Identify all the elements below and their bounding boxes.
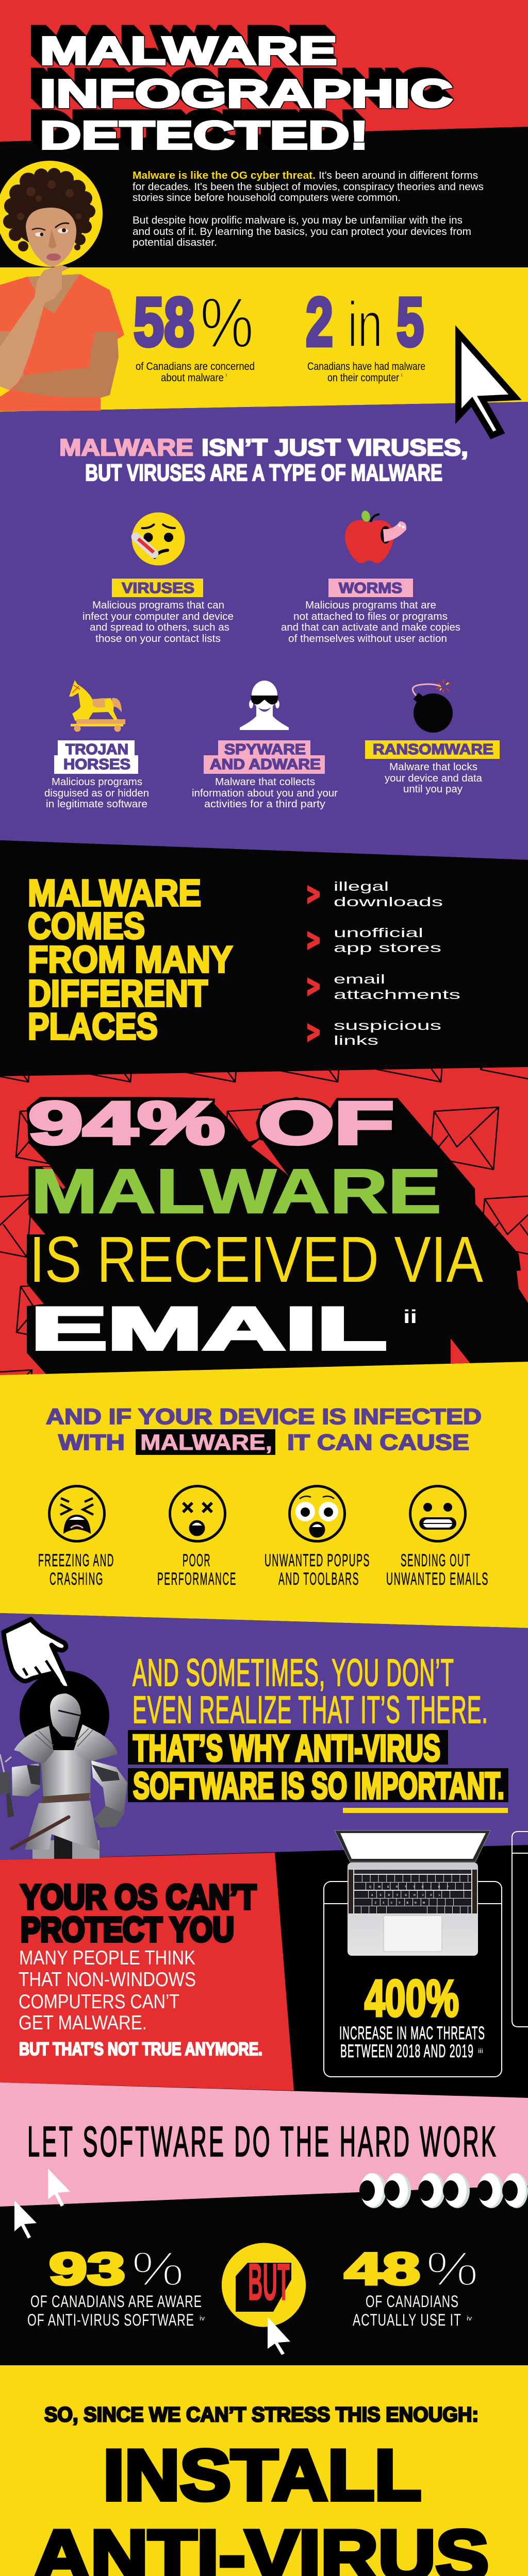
icon: apple with worm [345, 510, 406, 563]
callout: anti-virus importance [128, 1728, 508, 1813]
statistic: 48 percent actually use it: 48 [344, 2243, 420, 2294]
text: email: EMAIL [31, 1295, 387, 1362]
title [40, 29, 453, 158]
text: trojan horses description [44, 776, 149, 810]
heading: malware comes from many different places: COMES [28, 906, 145, 947]
label: viruses [112, 579, 203, 597]
icon: chevrons [307, 885, 320, 1042]
text: effect labels: AND TOOLBARS [278, 1569, 359, 1589]
label: trojan horses [54, 740, 138, 774]
heading: malware comes from many different places: DIFFERENT [28, 973, 208, 1014]
heading: since we can't stress this enough: SO, SINCE WE CAN’T STRESS THIS ENOUGH: [44, 2403, 478, 2426]
icon: small cursor [48, 2168, 70, 2207]
label: viruses: VIRUSES [122, 580, 194, 597]
panel: yellow stats background [0, 267, 528, 412]
text: spyware description [192, 776, 338, 810]
text: sometimes you don't realize [133, 1651, 488, 1731]
text: ransomware description: Malware that locks [389, 761, 477, 773]
panel: black mac threats background [275, 1845, 528, 2098]
footnote mark: ii [403, 1306, 417, 1327]
text: ransomware description: your device and data [385, 773, 483, 784]
stat: 2 in 5 Canadians: i [401, 372, 402, 378]
icon: spy silhouette [240, 681, 289, 730]
icon: bomb [412, 680, 453, 733]
stat: 58 percent of Canadians: % [200, 283, 254, 363]
stat: 58 percent of Canadians: i [226, 372, 227, 378]
statistic: 48 percent actually use it: ACTUALLY USE IT [353, 2311, 461, 2329]
text: malware: MALWARE [31, 1156, 441, 1226]
statistic: 400 percent increase in mac threats: 400% [365, 1970, 459, 2027]
illustration: laptop: Z X C V B N M [375, 1902, 425, 1905]
icon: googly eyes [359, 2173, 528, 2208]
icon: grimacing face [410, 1486, 465, 1541]
intro text: It's been around in different forms [319, 170, 478, 181]
panel: red title background [0, 0, 528, 142]
icon: small cursor [14, 2200, 37, 2239]
label: worms [328, 579, 413, 597]
text: effect labels [38, 1551, 489, 1589]
panel: purple malware types background [0, 402, 528, 860]
title: DETECTED! [40, 113, 369, 158]
icon: large cursor [458, 333, 515, 435]
text: source items: unofficial [334, 926, 423, 940]
stat: 58 percent of Canadians: 58 [134, 284, 194, 361]
label: spyware and adware: SPYWARE [224, 741, 306, 758]
icon: shocked face [290, 1486, 344, 1541]
heading: malware comes from many different places: PLACES [28, 1006, 158, 1047]
intro text: for decades. It's been the subject of movies, conspiracy theories and news [133, 181, 484, 193]
badge: but [222, 2243, 306, 2327]
label: trojan horses: TROJAN [65, 741, 128, 758]
heading: malware comes from many different places [28, 873, 233, 1047]
text: your OS can't protect you: MANY PEOPLE THINK [19, 1947, 195, 1969]
text: effect labels: FREEZING AND [38, 1551, 114, 1570]
statistic: 48 percent actually use it: iv [467, 2314, 472, 2322]
text: source items: illegal [334, 879, 389, 894]
text: ransomware description: until you pay [403, 784, 463, 795]
icon: small cursor [268, 2317, 290, 2355]
pattern: envelopes [0, 1020, 528, 1432]
intro text [133, 170, 484, 248]
statistic: 93 percent aware: iv [200, 2314, 205, 2322]
text: your OS can't protect you [19, 1878, 262, 2059]
list: malware sources [307, 879, 460, 1048]
stat: 2 in 5 Canadians: 5 [397, 284, 424, 361]
heading: if your device is infected: MALWARE, [140, 1430, 272, 1455]
panel: pink hard work background [0, 2082, 528, 2207]
text: trojan horses description: in legitimate software [46, 799, 147, 810]
text: source items: links [334, 1033, 378, 1048]
text: effect labels: POOR [183, 1551, 211, 1570]
text: your OS can't protect you: COMPUTERS CAN’T [19, 1991, 179, 2013]
text: 94% of: 94% [28, 1089, 225, 1157]
label: ransomware: RANSOMWARE [373, 741, 493, 758]
label: worms: WORMS [339, 580, 402, 597]
illustration: knight in armour [0, 1671, 127, 1859]
text: source items: downloads [334, 895, 443, 909]
intro text: potential disaster. [133, 237, 217, 248]
text: spyware description: activities for a third party [204, 799, 325, 810]
illustration: laptop [335, 1831, 490, 1956]
text: viruses description: Malicious programs that can [92, 600, 224, 611]
statistic: 48 percent actually use it [344, 2242, 478, 2329]
statistic: 48 percent actually use it: % [426, 2242, 478, 2296]
illustration: laptop: A S D F G H J K L [371, 1894, 440, 1897]
statistic: 93 percent aware: 93 [49, 2243, 125, 2294]
text: effect labels: UNWANTED POPUPS [265, 1551, 370, 1570]
panel: red operating system background [0, 1853, 294, 2091]
label: trojan horses: HORSES [63, 756, 130, 773]
statistic: 400 percent increase in mac threats: iii [478, 2047, 483, 2055]
panel: black sources background [0, 840, 528, 1076]
statistic: 400 percent increase in mac threats [339, 1970, 485, 2061]
panel: purple anti-virus background [0, 1613, 528, 1860]
text: effect labels: PERFORMANCE [157, 1569, 237, 1589]
text: trojan horses description: disguised as or hidden [44, 788, 149, 799]
panel: yellow install background [0, 2365, 528, 2576]
stat: 2 in 5 Canadians: 2 [306, 284, 333, 361]
heading: malware isn't just viruses: ISN’T JUST VIRUSES, [202, 434, 468, 461]
text: source items [334, 879, 460, 1048]
panel: black intro background [0, 127, 528, 267]
heading: if your device is infected: AND IF YOUR DEVICE IS INFECTED [46, 1404, 482, 1429]
text: spyware description: Malware that collects [215, 776, 315, 788]
text: viruses description: infect your computer and device [82, 611, 234, 622]
stat: 58 percent of Canadians [134, 283, 255, 384]
heading: if your device is infected [46, 1404, 482, 1455]
stat: 2 in 5 Canadians: in [348, 289, 383, 361]
label: spyware and adware: AND ADWARE [210, 756, 321, 773]
text: worms description [281, 600, 460, 645]
heading: install anti-virus software: INSTALL [103, 2435, 421, 2515]
heading: if your device is infected: IT CAN CAUSE [287, 1430, 469, 1455]
text: viruses description: and spread to others, such as [90, 622, 229, 633]
statistic: 93 percent aware: OF CANADIANS ARE AWARE [30, 2292, 202, 2311]
text: 94% of [28, 1089, 394, 1157]
panel: red email statistic background [0, 1067, 528, 1375]
icon: sick emoji [132, 512, 185, 566]
heading: malware comes from many different places: MALWARE [28, 873, 201, 914]
statistic: 48 percent actually use it: OF CANADIANS [366, 2292, 459, 2311]
text: worms description: of themselves without user action [288, 633, 447, 645]
stat: 2 in 5 Canadians: Canadians have had malware [307, 361, 425, 372]
illustration: laptop: Q W E R T Y U I O P [369, 1886, 449, 1889]
text: trojan horses description: Malicious programs [52, 776, 142, 788]
statistic: 94 percent of malware is received via email [28, 1089, 483, 1362]
text: your OS can't protect you: THAT NON-WINDOWS [19, 1969, 196, 1991]
text: worms description: and that can activate and make copies [281, 622, 460, 633]
text: effect labels: CRASHING [50, 1569, 104, 1589]
text: worms description: not attached to files or programs [293, 611, 448, 622]
stat: 58 percent of Canadians: of Canadians are concerned [136, 361, 255, 372]
icon: trojan horse [69, 680, 125, 732]
text: 94% of: OF [258, 1089, 394, 1157]
statistic: 93 percent aware: OF ANTI-VIRUS SOFTWARE [27, 2311, 194, 2329]
text: viruses description [82, 600, 234, 645]
intro text: stories since before household computers were common. [133, 192, 401, 204]
text: your OS can't protect you: PROTECT YOU [21, 1910, 234, 1949]
intro highlight: Malware is like the OG cyber threat. [133, 170, 316, 181]
title: INFOGRAPHIC [40, 72, 453, 116]
heading: malware isn't just viruses [59, 434, 468, 486]
text: source items: suspicious [334, 1019, 441, 1033]
heading: malware isn't just viruses: MALWARE [59, 434, 193, 461]
icon: dizzy face [170, 1486, 225, 1541]
title: MALWARE [40, 29, 337, 73]
panel: black awareness stats background [0, 2185, 528, 2365]
intro text: But despite how prolific malware is, you may be unfamiliar with the ins [133, 215, 463, 226]
stat: 2 in 5 Canadians: on their computer [327, 372, 399, 384]
heading: malware comes from many different places: FROM MANY [28, 939, 233, 980]
graphic: block shadow behind email statistic [27, 1097, 528, 1375]
text: worms description: Malicious programs that are [305, 600, 436, 611]
panel: phone outline [512, 1832, 528, 2027]
label: spyware and adware [204, 740, 325, 774]
text: ransomware description [385, 761, 483, 795]
stat: 58 percent of Canadians: about malware [161, 372, 224, 384]
text: spyware description: information about you and your [192, 788, 338, 799]
heading: if your device is infected: WITH [58, 1430, 125, 1455]
text: viruses description: those on your contact lists [95, 633, 221, 645]
badge: but: BUT [248, 2253, 290, 2311]
photo: woman thinking [0, 161, 124, 411]
icon: pointing hand [4, 1619, 70, 1688]
text: your OS can't protect you: BUT THAT’S NOT TRUE ANYMORE. [19, 2039, 262, 2059]
text: your OS can't protect you: GET MALWARE. [19, 2012, 147, 2034]
text: source items: email [334, 972, 385, 987]
text: your OS can't protect you: YOUR OS CAN’T [21, 1878, 256, 1917]
stat: 2 in 5 Canadians [306, 284, 425, 384]
panel: yellow effects background [0, 1362, 528, 1628]
text: source items: attachments [334, 988, 460, 1002]
icon: crying face [50, 1486, 104, 1541]
heading: install anti-virus software [33, 2435, 489, 2576]
panel: tablet outline [324, 1882, 502, 2077]
statistic: 93 percent aware [27, 2242, 205, 2329]
intro text: and outs of it. By learning the basics, you can protect your devices from [133, 226, 471, 238]
statistic: 93 percent aware: % [131, 2242, 184, 2296]
text: source items: app stores [334, 941, 441, 955]
